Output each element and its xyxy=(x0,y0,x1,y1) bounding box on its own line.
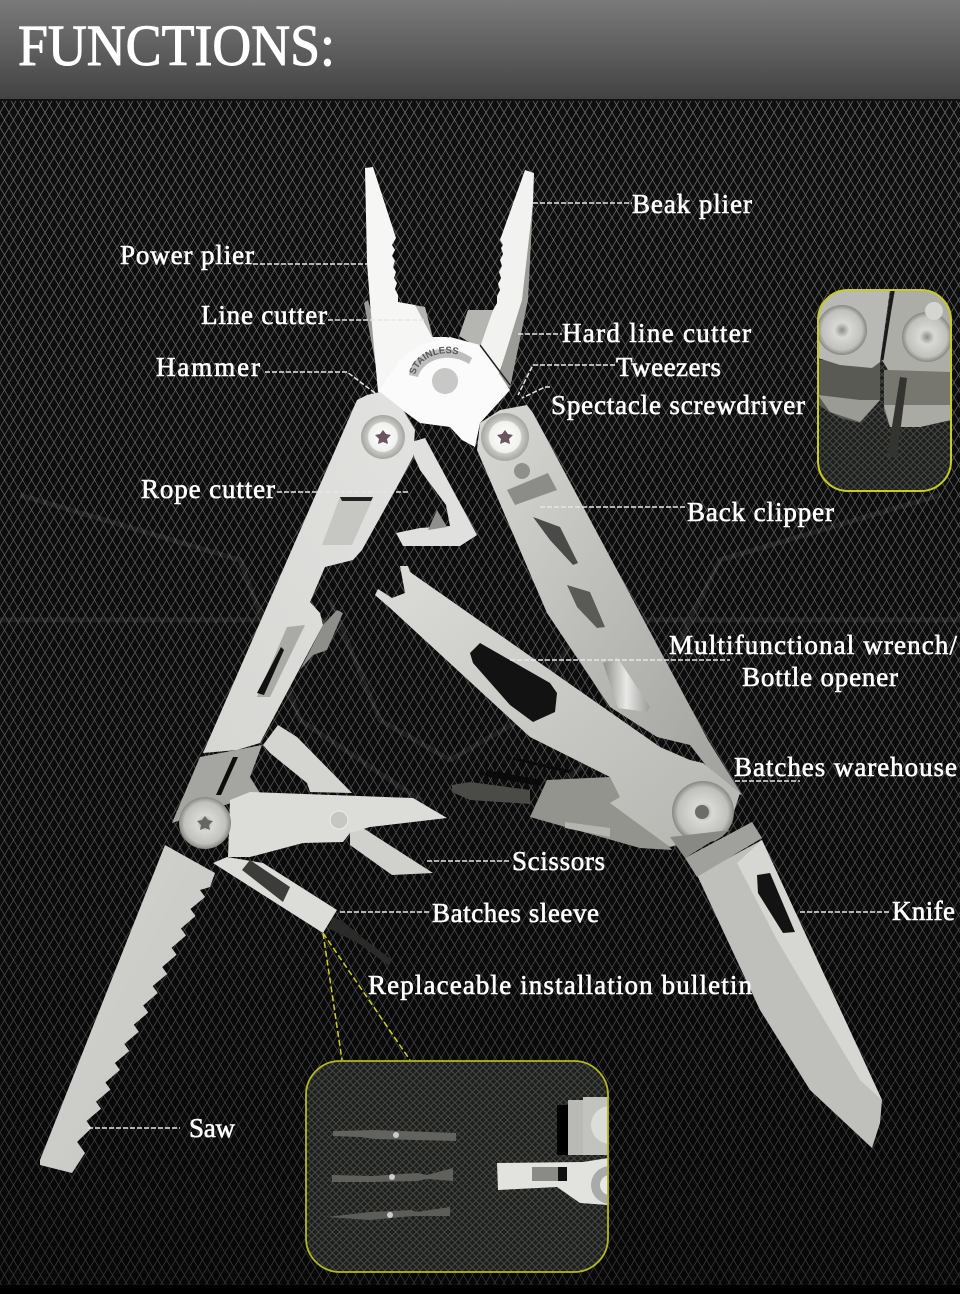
rope cutter hook xyxy=(396,438,477,546)
knife xyxy=(670,822,882,1148)
multitool xyxy=(40,167,882,1173)
labels: Batches warehouse xyxy=(734,752,957,782)
plier hub with stainless badge xyxy=(378,337,510,447)
labels: Bottle opener xyxy=(742,662,898,692)
labels: Knife xyxy=(892,896,955,926)
saw xyxy=(40,845,215,1173)
labels: Hammer xyxy=(156,352,260,382)
wrench and bottle opener xyxy=(375,566,740,850)
bit in warehouse xyxy=(452,782,530,804)
right plier jaw xyxy=(470,170,534,378)
scissors xyxy=(172,725,447,875)
yellow connector to bits inset xyxy=(323,933,410,1060)
labels: Line cutter xyxy=(201,300,327,330)
right handle xyxy=(477,405,742,795)
labels: Back clipper xyxy=(687,497,834,527)
batches sleeve xyxy=(213,857,392,965)
bit 2 xyxy=(332,1168,453,1182)
cutter plates xyxy=(414,305,493,350)
bit 1 xyxy=(333,1130,456,1141)
bit 3 xyxy=(327,1207,450,1220)
labels: Scissors xyxy=(512,846,605,876)
plier gray shaded sides xyxy=(364,203,533,392)
labels: Hard line cutter xyxy=(562,318,751,348)
labels: Saw xyxy=(189,1113,236,1143)
inset: replaceable bits xyxy=(306,1061,629,1272)
title: FUNCTIONS: xyxy=(18,13,335,78)
leader lines xyxy=(88,203,890,1128)
left plier jaw xyxy=(365,167,448,392)
labels: Beak plier xyxy=(632,189,752,219)
labels: Batches sleeve xyxy=(432,898,599,928)
labels: Tweezers xyxy=(616,352,721,382)
labels: Replaceable installation bulletin xyxy=(368,970,752,1000)
plier hub with stainless badge: STAINLESS xyxy=(410,346,458,374)
labels: Spectacle screwdriver xyxy=(551,390,805,420)
tool detail xyxy=(557,1105,569,1155)
back clipper xyxy=(603,657,650,712)
inset: spectacle screwdriver close-up xyxy=(817,290,952,491)
labels: Rope cutter xyxy=(141,474,275,504)
labels xyxy=(120,189,957,1143)
labels: Power plier xyxy=(120,240,254,270)
lever plate xyxy=(530,777,672,850)
left handle xyxy=(203,392,415,753)
labels: Multifunctional wrench/ xyxy=(669,630,957,660)
header bar xyxy=(0,0,960,101)
replaceable bit xyxy=(328,917,392,965)
